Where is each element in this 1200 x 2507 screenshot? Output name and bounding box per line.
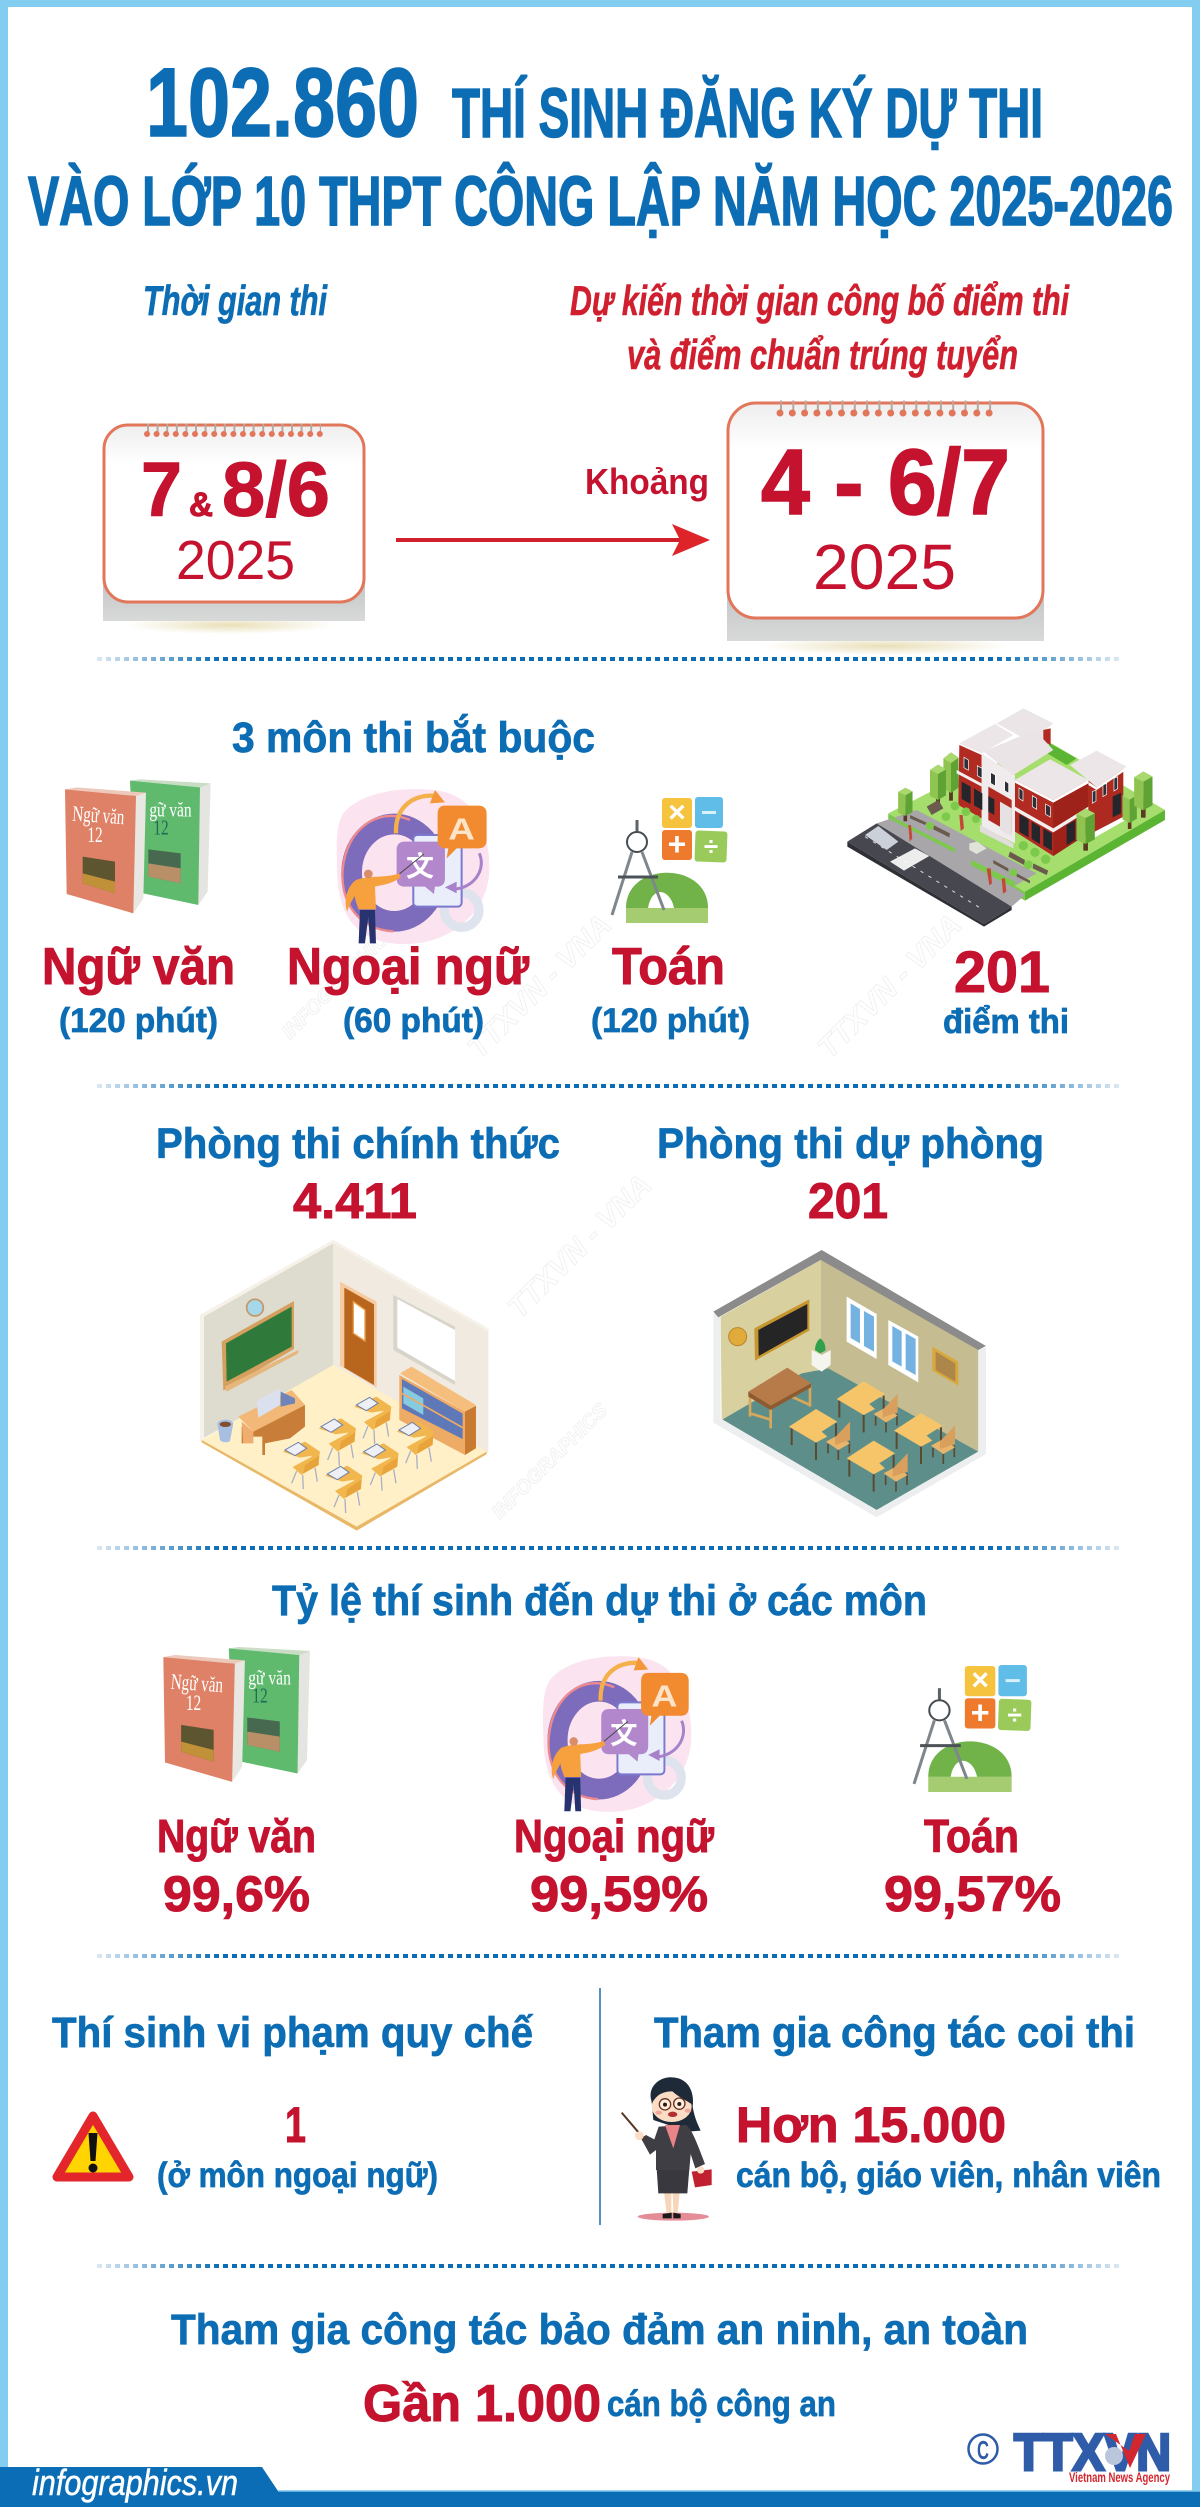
heading: 3 compulsory subjects: 3 môn thi bắt buộc	[232, 713, 595, 762]
stat: literature attendance: Ngữ văn	[157, 1810, 316, 1862]
stat: official rooms: Phòng thi chính thức	[156, 1120, 560, 1168]
panel: invigilators	[622, 2009, 1161, 2221]
icon: foreign language	[337, 789, 489, 944]
label: Literature: (120 phút)	[59, 1002, 218, 1040]
stat: official rooms	[156, 1120, 560, 1229]
logo: TTXVN	[968, 2424, 1171, 2485]
logo: TTXVN: TTXVN	[1014, 2424, 1171, 2482]
watermarks	[278, 908, 968, 1524]
icon: mathematics tools: +	[971, 1695, 990, 1730]
stat: official rooms: 4.411	[293, 1173, 417, 1229]
calendar: exam date: 8/6	[222, 447, 330, 533]
divider: vertical	[599, 1988, 601, 2225]
calendar: result date	[727, 403, 1044, 655]
stat: literature attendance: 99,6%	[163, 1866, 310, 1922]
illustration: school building	[847, 708, 1165, 927]
footer bar	[0, 2462, 1200, 2507]
icon: literature books	[65, 779, 211, 913]
stat: nearly 1,000: Gần 1.000	[363, 2375, 601, 2433]
calendar: exam date: &	[189, 486, 213, 524]
footer site name: infographics.vn	[32, 2462, 238, 2503]
stat: literature attendance	[157, 1810, 316, 1922]
label: Foreign language: Ngoại ngữ	[287, 938, 529, 996]
calendar: result date: 2025	[813, 531, 956, 603]
icon: teacher	[622, 2077, 712, 2221]
icon: literature books: 12	[252, 1685, 268, 1708]
icon: literature books: gữ văn	[248, 1667, 291, 1690]
watermarks: INFOGRAPHICS	[488, 1399, 612, 1524]
stat: exam sites: 201	[954, 940, 1050, 1005]
panel: regulation violations	[52, 2009, 533, 2195]
watermarks: TTXVN - VNA	[812, 908, 968, 1065]
icon: foreign language	[543, 1656, 691, 1812]
stat: mathematics attendance	[884, 1810, 1061, 1922]
icon: warning triangle	[57, 2116, 129, 2177]
icon: mathematics tools: +	[668, 826, 686, 862]
watermarks: INFOGRAPHICS	[278, 919, 402, 1044]
watermarks: TTXVN - VNA	[502, 1168, 658, 1325]
heading: expected publication time	[570, 277, 1070, 378]
icon: foreign language: 文	[406, 851, 434, 882]
heading: expected publication time: và điểm chuẩn trúng tuyển	[627, 331, 1018, 378]
label: Mathematics: (120 phút)	[591, 1002, 750, 1040]
label: about: Khoảng	[585, 461, 709, 502]
stat: exam sites	[943, 940, 1069, 1041]
logo: TTXVN: C	[977, 2435, 989, 2465]
calendar: exam date	[103, 425, 365, 634]
stat: foreign language attendance: 99,59%	[530, 1866, 708, 1922]
icon: mathematics tools: ×	[971, 1664, 989, 1697]
label: Mathematics	[591, 938, 750, 1040]
calendar: exam date: 7	[141, 447, 182, 533]
calendar: exam date: 2025	[176, 529, 295, 591]
arrow	[396, 524, 710, 556]
note: staff types: cán bộ, giáo viên, nhân viên	[736, 2156, 1161, 2195]
note: police officers: cán bộ công an	[607, 2383, 836, 2424]
heading: exam time: Thời gian thi	[143, 277, 328, 324]
stat: one violation: 1	[285, 2097, 306, 2153]
heading: violations: Thí sinh vi phạm quy chế	[52, 2009, 533, 2057]
icon: mathematics tools	[612, 796, 728, 923]
heading: invigilation: Tham gia công tác coi thi	[654, 2009, 1135, 2057]
stat: foreign language attendance	[514, 1810, 715, 1922]
stat: exam sites: điểm thi	[943, 1003, 1069, 1041]
illustration: reserve classroom	[713, 1250, 986, 1517]
icon: foreign language: A	[651, 1680, 678, 1714]
note: in foreign language: (ở môn ngoại ngữ)	[157, 2156, 438, 2195]
heading: security: Tham gia công tác bảo đảm an ninh, an toàn	[171, 2306, 1028, 2354]
panel: three compulsory subjects	[42, 708, 1165, 1041]
stat: reserve rooms	[657, 1120, 1044, 1229]
icon: foreign language: A	[448, 812, 475, 846]
stat: over 15,000: Hơn 15.000	[736, 2097, 1006, 2153]
title: 102.860	[146, 48, 419, 157]
panel: exam rooms	[156, 1120, 1044, 1531]
stat: reserve rooms: 201	[808, 1173, 888, 1229]
icon: mathematics tools	[914, 1664, 1031, 1792]
calendar: result date: 4 - 6/7	[761, 430, 1010, 534]
heading: attendance rate: Tỷ lệ thí sinh đến dự thi ở các môn	[272, 1577, 927, 1625]
icon: mathematics tools: ×	[668, 796, 686, 829]
icon: literature books: 12	[153, 818, 169, 840]
label: Mathematics: Toán	[612, 938, 725, 996]
icon: literature books: Ngữ văn	[170, 1669, 224, 1697]
stat: mathematics attendance: 99,57%	[884, 1866, 1061, 1922]
panel: attendance rates	[157, 1577, 1061, 1922]
label: Foreign language	[287, 938, 529, 1040]
icon: literature books: 12	[87, 822, 103, 847]
icon: literature books: Ngữ văn	[72, 801, 125, 829]
label: Literature	[42, 938, 235, 1040]
icon: mathematics tools: ÷	[1007, 1700, 1022, 1729]
stat: foreign language attendance: Ngoại ngữ	[514, 1810, 715, 1862]
label: Literature: Ngữ văn	[42, 938, 235, 996]
panel: exam and result dates	[103, 277, 1070, 655]
icon: literature books: gữ văn	[149, 800, 192, 822]
icon: mathematics tools: ÷	[704, 831, 718, 861]
icon: literature books	[163, 1647, 310, 1782]
title	[28, 48, 1173, 240]
icon: literature books: 12	[186, 1690, 201, 1715]
stat: reserve rooms: Phòng thi dự phòng	[657, 1120, 1044, 1168]
illustration: official classroom	[200, 1240, 488, 1531]
label: Foreign language: (60 phút)	[343, 1002, 484, 1040]
watermarks: TTXVN - VNA	[462, 908, 618, 1065]
panel: security	[171, 2306, 1028, 2433]
icon: foreign language: 文	[610, 1718, 638, 1750]
stat: mathematics attendance: Toán	[924, 1810, 1019, 1862]
